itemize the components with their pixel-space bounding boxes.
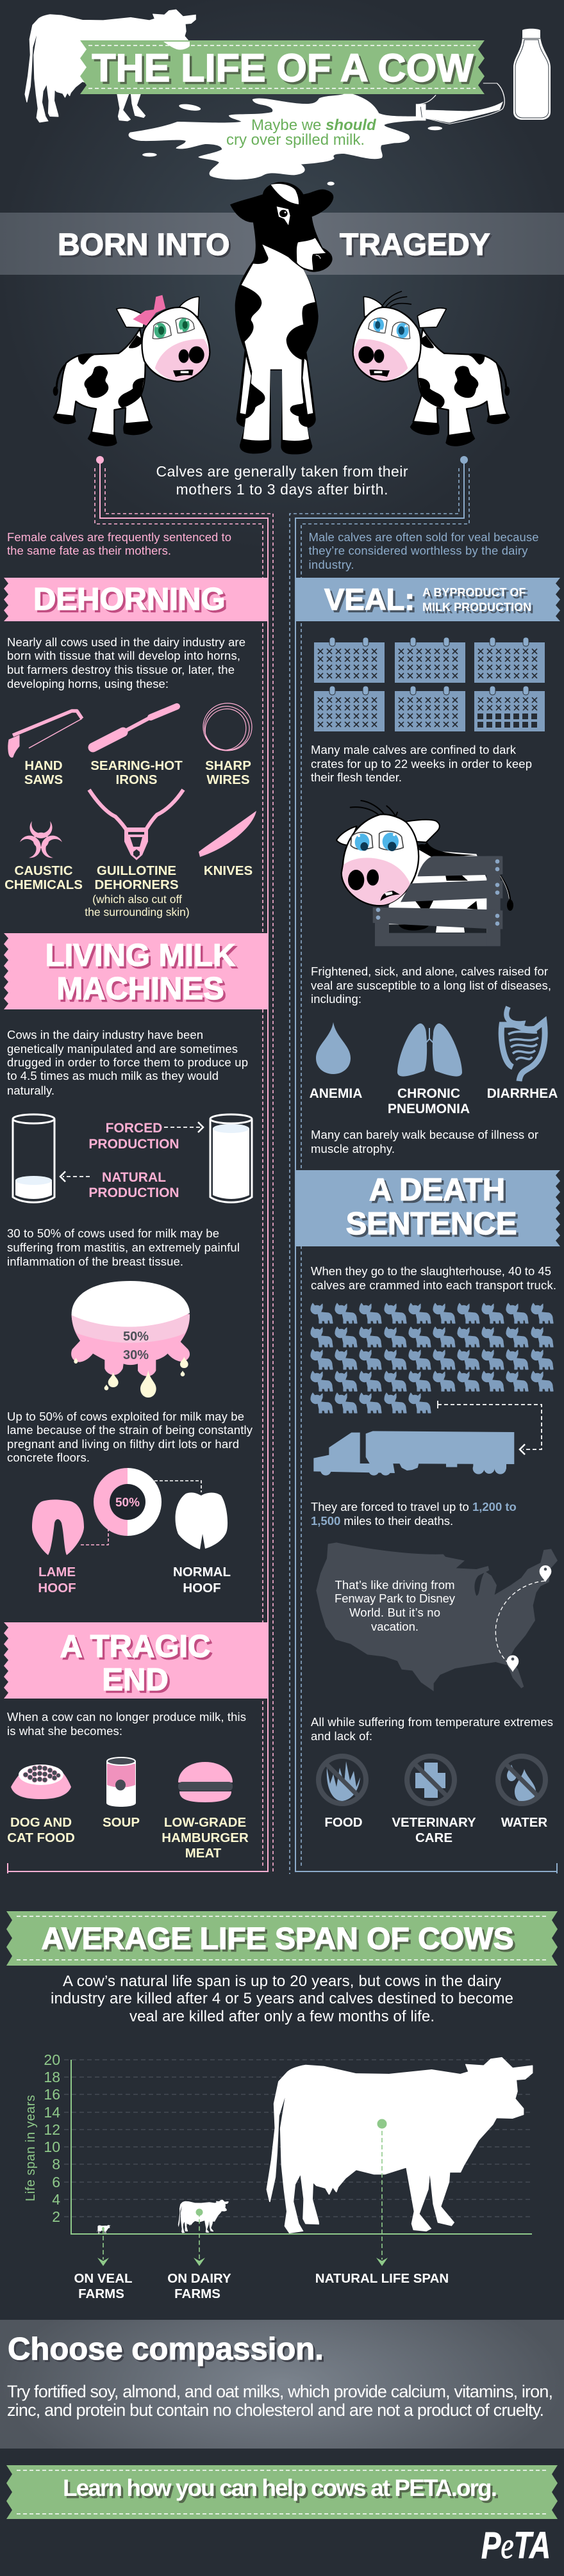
lame text: concrete floors. [7,1451,90,1464]
crated calf [336,801,513,946]
label: guillotine dehorners: GUILLOTINE [97,863,176,878]
icon: normal hoof [176,1492,228,1549]
icon: lame hoof [32,1499,84,1555]
mastitis text: inflammation of the breast tissue. [7,1255,183,1268]
axis numbers: 20 [44,2051,60,2068]
title banner [80,40,485,94]
icon: knife [199,811,256,857]
label: knives: KNIVES [204,863,253,878]
arrow: forced [164,1122,203,1132]
axis numbers: 16 [44,2086,60,2103]
ribbon: living milk machines [4,933,268,1009]
milk splash [129,83,504,186]
female text: the same fate as their mothers. [7,544,171,557]
pink connector [8,456,273,1874]
female text: Female calves are frequently sentenced to [7,530,231,544]
crate text: crates for up to 22 weeks in order to keep [311,757,532,770]
axis numbers: 2 [52,2208,60,2225]
panel: a death sentence [295,1170,560,1845]
label: on veal farms: ON VEAL [74,2271,133,2286]
icon: truck [313,1431,514,1476]
label: water: WATER [501,1815,547,1830]
extremes text: All while suffering from temperature extremes [311,1715,553,1729]
label: sharp wires: WIRES [206,772,250,787]
label: normal hoof: HOOF [183,1581,221,1595]
blue connector [290,456,557,1874]
label: normal hoof: NORMAL [173,1565,231,1579]
lame text: Up to 50% of cows exploited for milk may be [7,1410,244,1423]
axis numbers: 8 [52,2156,60,2172]
label: lame hoof: LAME [38,1565,76,1579]
axis numbers: 6 [52,2174,60,2190]
ribbon: veal: VEAL: [324,582,415,616]
label: searing-hot irons: IRONS [116,772,157,787]
ribbon: average life span [6,1911,558,1966]
label: natural production: PRODUCTION [88,1186,179,1200]
genetic text: genetically manipulated and are sometimes [7,1042,238,1056]
center cow [230,182,333,454]
label: dog and cat food: DOG AND [10,1815,72,1830]
icon: calves grid [311,1303,553,1413]
panel: veal [295,578,560,1155]
panel: living milk machines [4,933,268,1595]
left calf [53,295,210,446]
lame text: pregnant and living on filthy dirt lots or hard [7,1437,239,1451]
distance text: They are forced to travel up to 1,200 to [311,1500,517,1513]
distance text: 1,500 miles to their deaths. [311,1514,453,1528]
icon: no water [498,1756,545,1804]
map: united states: Fenway Park to Disney [335,1592,456,1605]
axis numbers: 4 [52,2191,60,2208]
icon: guillotine dehorner [89,790,183,860]
disease text: Frightened, sick, and alone, calves raised for [311,965,548,978]
band: born into tragedy [0,213,564,275]
note: the surrounding skin) [85,906,190,918]
mastitis text: 30 to 50% of cows used for milk may be [7,1227,219,1240]
life span text: A cow’s natural life span is up to 20 years, but cows in the dairy [63,1973,501,1990]
icon: hamburger [178,1762,233,1802]
axes [71,2060,532,2234]
life span text: industry are killed after 4 or 5 years and calves destined to become [51,1990,513,2007]
disease text: including: [311,992,361,1006]
ribbon: a tragic end: END [102,1663,169,1697]
compassion text: zinc, and protein but contain no cholesterol and are not a product of cruelty. [7,2401,544,2420]
icon: no veterinary care [407,1756,454,1804]
map: united states: World. But it’s no [349,1606,440,1619]
label: natural production: NATURAL [102,1170,166,1185]
ribbon: a death sentence: SENTENCE [346,1207,517,1241]
big cow [267,2057,533,2233]
walk text: muscle atrophy. [311,1142,395,1155]
label: on veal farms: FARMS [78,2287,124,2301]
ribbon: a death sentence: A DEATH [369,1173,505,1207]
disease text: veal are susceptible to a long list of diseases, [311,979,551,992]
icon: udder chart [71,1281,190,1398]
arrow: calves to truck [438,1401,542,1455]
icon: biohazard [19,821,63,860]
label: diarrhea: DIARRHEA [487,1086,558,1101]
connector: normal hoof [154,1481,201,1492]
ribbon: a tragic end [4,1622,268,1699]
label: chronic pneumonia: CHRONIC [397,1086,460,1101]
heading: born into: BORN INTO [58,228,229,262]
label: sharp wires: SHARP [205,758,251,773]
label: low-grade hamburger meat: HAMBURGER [162,1830,249,1845]
connector: lame hoof [81,1529,108,1545]
label: lame hoof: HOOF [38,1581,76,1595]
label: hand saws: HAND [24,758,63,773]
icon: hand saw [8,711,82,757]
label: caustic chemicals: CAUSTIC [14,863,73,878]
label: dog and cat food: CAT FOOD [7,1830,75,1845]
label: forced production: PRODUCTION [88,1137,179,1152]
crate text: Many male calves are confined to dark [311,743,517,756]
label: searing-hot irons: SEARING-HOT [90,758,183,773]
label: chronic pneumonia: PNEUMONIA [388,1102,470,1116]
compassion text: Try fortified soy, almond, and oat milks, which provide calcium, vitamins, iron, [7,2382,553,2401]
crate text: their flesh tender. [311,770,402,784]
icon: forced glass [210,1114,252,1202]
panel: dehorning [4,578,268,918]
axis numbers: 18 [44,2069,60,2085]
ribbon: veal: A BYPRODUCT OF [422,586,526,599]
mid cow [178,2200,228,2233]
cta banner: Learn how you can help cows at PETA.org. [63,2475,497,2501]
right calf [353,291,510,446]
genetic text: to 4.5 times as much milk as they would [7,1069,219,1082]
grid lines [64,2060,532,2217]
ribbon: average life span: AVERAGE LIFE SPAN OF COWS [42,1922,513,1956]
intro text: Calves are generally taken from their [156,463,408,480]
ribbon: veal [295,578,560,621]
lame text: lame because of the strain of being constantly [7,1423,253,1437]
icon: pet food bowl [11,1765,71,1799]
label: low-grade hamburger meat: LOW-GRADE [164,1815,246,1830]
label: on dairy farms: ON DAIRY [167,2271,231,2286]
male text: they’re considered worthless by the dairy [309,544,528,557]
male text: industry. [309,558,354,571]
label: veterinary care: VETERINARY [392,1815,476,1830]
life span text: veal are killed after only a few months of life. [129,2008,435,2025]
genetic text: drugged in order to force them to produce up [7,1056,248,1069]
dehorning text: but farmers destroy this tissue or, later, the [7,663,235,676]
icon: iron [93,706,177,747]
icon: natural glass [13,1114,54,1202]
ribbon: veal: MILK PRODUCTION [422,601,531,614]
ribbon: dehorning: DEHORNING [33,582,225,617]
label: hand saws: SAWS [24,772,63,787]
note: (which also cut off [92,893,182,906]
logo: PETA: PeTA [481,2525,551,2566]
icon: udder chart: 30% [123,1348,149,1362]
icon: no food [319,1756,366,1804]
intro text: mothers 1 to 3 days after birth. [176,481,388,498]
panel: a tragic end [4,1622,268,1861]
transport text: When they go to the slaughterhouse, 40 to 45 [311,1264,551,1278]
milk bottle [513,29,551,120]
chart [24,2051,533,2266]
map: united states [316,1542,558,1692]
tagline: Maybe we should [251,117,376,134]
header group [25,10,551,186]
walk text: Many can barely walk because of illness or [311,1128,538,1141]
icon: lungs [397,1023,462,1077]
arrow: natural [60,1171,90,1182]
label: anemia: ANEMIA [310,1086,362,1101]
dehorning text: developing horns, using these: [7,677,169,690]
heading: tragedy: TRAGEDY [340,228,490,262]
icon: drop [316,1022,351,1074]
ribbon: dehorning [4,578,268,621]
icon: donut chart: 50% [115,1496,140,1510]
cow head overlap [163,42,190,50]
label: veterinary care: CARE [415,1830,452,1845]
axis numbers: 10 [44,2139,60,2155]
end text: is what she becomes: [7,1724,122,1738]
title: THE LIFE OF A COW [92,46,474,90]
label: guillotine dehorners: DEHORNERS [95,877,178,892]
genetic text: Cows in the dairy industry have been [7,1028,203,1041]
icon: donut chart [94,1468,162,1536]
genetic text: naturally. [7,1084,54,1097]
extremes text: and lack of: [311,1729,372,1743]
panel: choose compassion [0,2320,564,2449]
markers [97,2119,388,2266]
label: forced production: FORCED [106,1121,162,1136]
male text: Male calves are often sold for veal because [309,530,538,544]
cta banner [6,2465,558,2519]
icon: udder chart: 50% [123,1330,149,1344]
ribbon: living milk machines: MACHINES [56,972,224,1006]
axis numbers: 14 [44,2104,60,2121]
axis numbers: 12 [44,2121,60,2138]
icon: soup can [106,1757,136,1807]
ribbon: living milk machines: LIVING MILK [46,938,235,973]
heading: choose compassion: Choose compassion. [8,2332,324,2367]
end text: When a cow can no longer produce milk, this [7,1710,246,1724]
mastitis text: suffering from mastitis, an extremely painful [7,1241,240,1254]
label: food: FOOD [324,1815,363,1830]
icon: wire [197,700,256,758]
panel: average life span [6,1911,558,2301]
map: united states: vacation. [371,1620,419,1633]
label: natural life span: NATURAL LIFE SPAN [315,2271,449,2286]
ribbon: a tragic end: A TRAGIC [60,1629,210,1664]
small cow [97,2225,110,2234]
label: on dairy farms: FARMS [174,2287,220,2301]
tagline: cry over spilled milk. [226,131,365,149]
ribbon: a death sentence [295,1170,560,1246]
dehorning text: Nearly all cows used in the dairy industry are [7,635,245,649]
cow silhouette [25,10,195,122]
label: soup: SOUP [103,1815,140,1830]
map: united states: That’s like driving from [335,1578,455,1592]
label: low-grade hamburger meat: MEAT [185,1846,222,1861]
icon: intestines [501,1007,545,1081]
dehorning text: born with tissue that will develop into horns, [7,649,240,662]
transport text: calves are crammed into each transport truck. [311,1278,556,1292]
label: caustic chemicals: CHEMICALS [4,877,83,892]
icon: calendars [314,637,545,731]
axis title: Life span in years [24,2095,38,2201]
